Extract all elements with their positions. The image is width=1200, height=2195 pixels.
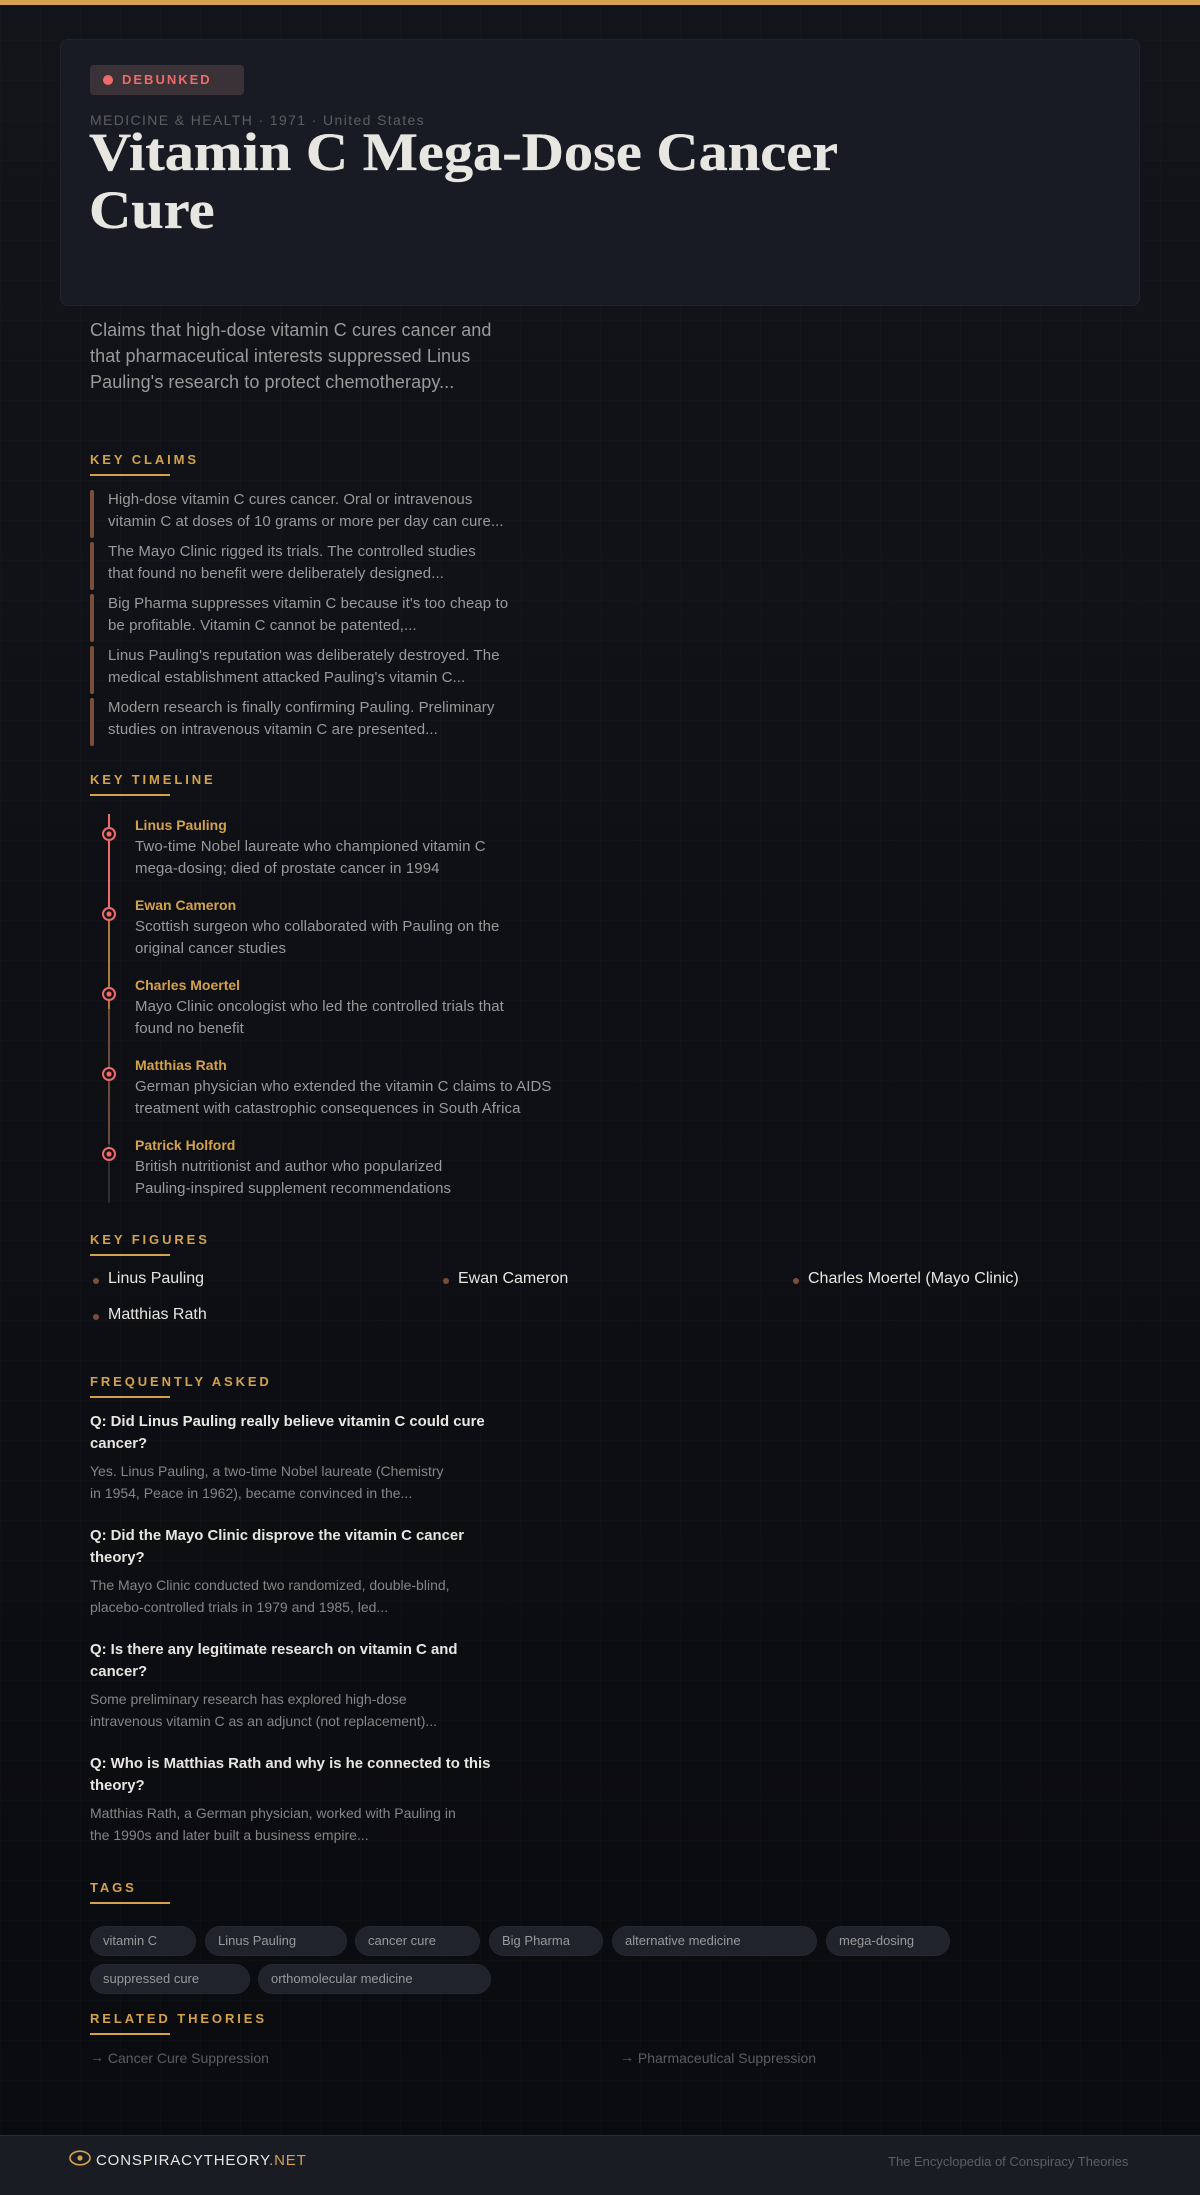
timeline entry: Linus Pauling: Two-time Nobel laureate who championed vitamin C [135,838,486,855]
claim list [90,490,508,746]
timeline entry: Patrick Holford [135,1137,451,1197]
tag: Linus Pauling: Linus Pauling [218,1933,296,1948]
timeline axis and markers [102,814,116,1203]
panel: header [60,39,1140,306]
timeline entry: Matthias Rath [135,1057,552,1117]
tag: mega-dosing [826,1926,950,1956]
timeline entry: Patrick Holford: Pauling-inspired supplement recommendations [135,1180,451,1197]
description: that pharmaceutical interests suppressed Linus [90,346,470,366]
claim 5: Modern research is finally confirming Pauling. Preliminary [108,699,494,716]
faq 2: The Mayo Clinic conducted two randomized, double-blind, [90,1577,450,1593]
heading: related theories: RELATED THEORIES [90,2011,267,2026]
claim 1: High-dose vitamin C cures cancer. Oral or intravenous [108,491,472,508]
timeline entry: Ewan Cameron: Scottish surgeon who collaborated with Pauling on the [135,918,499,935]
description [90,320,492,392]
description: Claims that high-dose vitamin C cures cancer and [90,320,492,340]
claim 5: studies on intravenous vitamin C are presented... [108,721,438,738]
faq 2 [90,1528,464,1615]
timeline entry: Charles Moertel: Mayo Clinic oncologist who led the controlled trials that [135,998,504,1015]
claim 5 [90,698,494,746]
faq 2: Q: Did the Mayo Clinic disprove the vitamin C cancer [90,1528,464,1544]
footer tagline: The Encyclopedia of Conspiracy Theories [888,2154,1128,2169]
timeline entry: Charles Moertel: found no benefit [135,1020,244,1037]
timeline entry: Ewan Cameron: original cancer studies [135,940,286,957]
icon: eye logo [69,2150,91,2166]
tag: vitamin C: vitamin C [103,1933,157,1948]
faq 4: Matthias Rath, a German physician, worked with Pauling in [90,1805,456,1821]
heading: key claims: KEY CLAIMS [90,452,199,467]
heading: frequently asked: FREQUENTLY ASKED [90,1374,272,1389]
faq 3: cancer? [90,1664,147,1680]
timeline entry: Charles Moertel [135,977,504,1037]
tag: orthomolecular medicine [258,1964,491,1994]
status badge: debunked: DEBUNKED [122,72,212,87]
timeline entry: Patrick Holford: British nutritionist and author who popularized [135,1158,442,1175]
claim 1: vitamin C at doses of 10 grams or more per day can cure... [108,513,504,530]
faq 1: Q: Did Linus Pauling really believe vitamin C could cure [90,1414,485,1430]
timeline entry: Linus Pauling: mega-dosing; died of prostate cancer in 1994 [135,860,440,877]
heading: tags: TAGS [90,1880,137,1895]
related link: pharmaceutical suppression: → Pharmaceutical Suppression [620,2049,816,2066]
tag: orthomolecular medicine: orthomolecular medicine [271,1971,413,1986]
faq 2: placebo-controlled trials in 1979 and 1985, led... [90,1599,388,1615]
faq 4: theory? [90,1778,145,1794]
faq 4: Q: Who is Matthias Rath and why is he connected to this [90,1756,490,1772]
faq 3: intravenous vitamin C as an adjunct (not replacement)... [90,1713,437,1729]
faq 1: cancer? [90,1436,147,1452]
timeline entry: Patrick Holford: Patrick Holford [135,1137,235,1153]
timeline entry: Ewan Cameron: Ewan Cameron [135,897,236,913]
timeline entry: Matthias Rath: German physician who extended the vitamin C claims to AIDS [135,1078,552,1095]
tag: suppressed cure: suppressed cure [103,1971,199,1986]
tag: cancer cure: cancer cure [368,1933,436,1948]
related link: cancer cure suppression: → Cancer Cure Suppression [90,2049,269,2066]
timeline entry: Linus Pauling: Linus Pauling [135,817,227,833]
claim 2: that found no benefit were deliberately designed... [108,565,444,582]
description: Pauling's research to protect chemotherapy... [90,372,454,392]
tag: vitamin C [90,1926,196,1956]
tag: suppressed cure [90,1964,250,1994]
timeline entry: Linus Pauling [135,817,486,877]
timeline entry: Ewan Cameron [135,897,499,957]
faq 1: Yes. Linus Pauling, a two-time Nobel laureate (Chemistry [90,1463,444,1479]
tag: Big Pharma: Big Pharma [502,1933,570,1948]
claim 3: be profitable. Vitamin C cannot be patented,... [108,617,417,634]
figure: Linus Pauling: Linus Pauling [108,1270,204,1287]
faq 3: Q: Is there any legitimate research on vitamin C and [90,1642,457,1658]
status badge: debunked [90,65,244,95]
tag: Big Pharma [489,1926,603,1956]
title: Vitamin C Mega-Dose Cancer [89,122,838,182]
timeline entry: Matthias Rath: Matthias Rath [135,1057,227,1073]
title [89,122,838,240]
faq 3: Some preliminary research has explored high-dose [90,1691,407,1707]
tag: alternative medicine [612,1926,817,1956]
claim 1 [90,490,504,538]
claim 4 [90,646,500,694]
top accent bar [0,0,1200,5]
faq 4: the 1990s and later built a business empire... [90,1827,369,1843]
claim 3: Big Pharma suppresses vitamin C because it's too cheap to [108,595,508,612]
title: Cure [89,180,215,240]
figure: Ewan Cameron: Ewan Cameron [458,1270,568,1287]
claim 4: medical establishment attacked Pauling's vitamin C... [108,669,465,686]
claim 4: Linus Pauling's reputation was deliberately destroyed. The [108,647,500,664]
figure: Matthias Rath: Matthias Rath [108,1306,207,1323]
faq 3 [90,1642,457,1729]
claim 2 [90,542,476,590]
heading: key timeline: KEY TIMELINE [90,772,216,787]
tag: Linus Pauling [205,1926,347,1956]
faq 1 [90,1414,485,1501]
figure: Charles Moertel: Charles Moertel (Mayo Clinic) [808,1270,1019,1287]
heading: key figures: KEY FIGURES [90,1232,210,1247]
faq 2: theory? [90,1550,145,1566]
footer [0,2135,1200,2195]
faq 1: in 1954, Peace in 1962), became convinced in the... [90,1485,412,1501]
timeline entry: Matthias Rath: treatment with catastrophic consequences in South Africa [135,1100,521,1117]
faq 4 [90,1756,490,1843]
tag: cancer cure [355,1926,480,1956]
claim 2: The Mayo Clinic rigged its trials. The controlled studies [108,543,476,560]
tag: alternative medicine: alternative medicine [625,1933,741,1948]
logo wordmark: CONSPIRACYTHEORY.NET [96,2152,307,2169]
category meta line: MEDICINE & HEALTH · 1971 · United States [90,112,425,128]
tag: mega-dosing: mega-dosing [839,1933,914,1948]
claim 3 [90,594,508,642]
timeline entry: Charles Moertel: Charles Moertel [135,977,240,993]
